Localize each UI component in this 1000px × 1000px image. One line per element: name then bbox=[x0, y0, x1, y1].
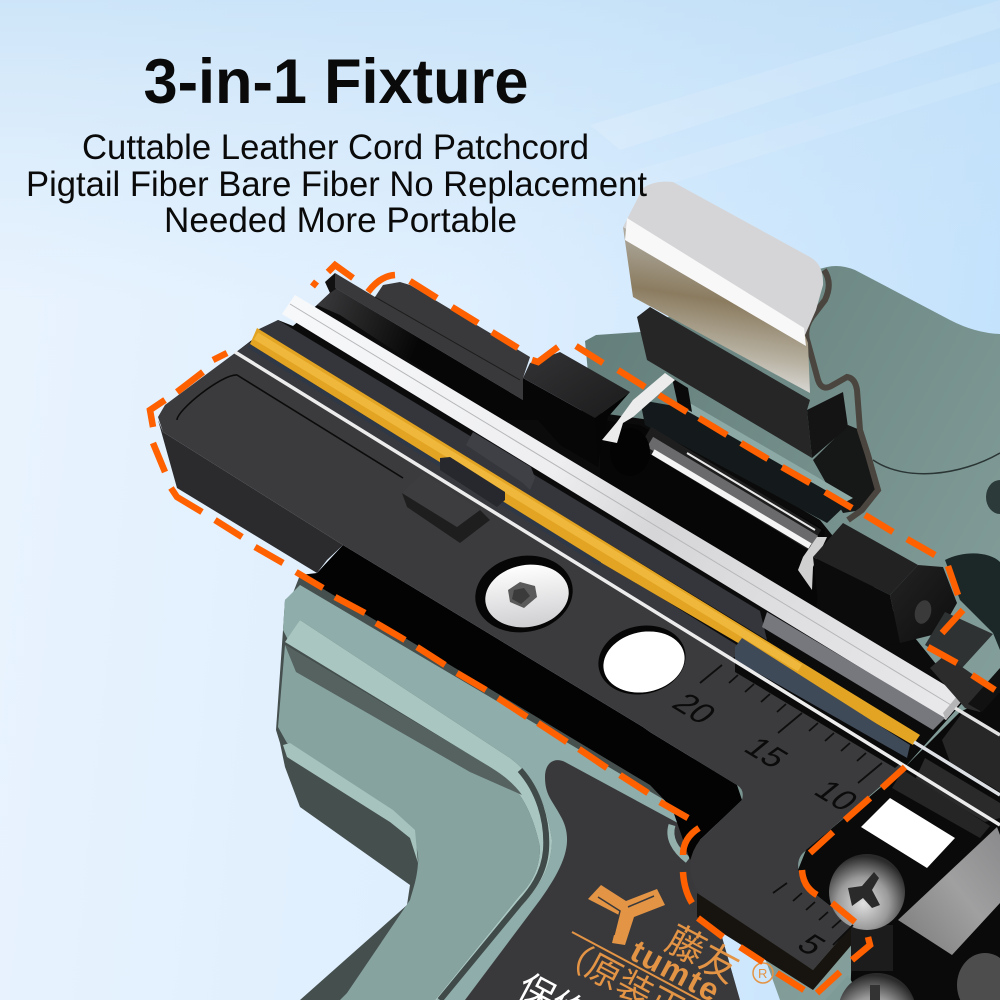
yellow patch cord bbox=[249, 328, 920, 745]
white through hole bbox=[592, 618, 692, 702]
curved groove shading bbox=[440, 770, 546, 1000]
teal sliver bbox=[825, 975, 862, 1000]
ruler numbers bbox=[665, 687, 867, 961]
tab step on plate bbox=[402, 473, 490, 543]
socket head screw bbox=[469, 548, 579, 640]
lever edge strip bbox=[806, 270, 878, 520]
floor shadow band bbox=[285, 645, 522, 795]
rod cap bbox=[610, 428, 650, 476]
recessed rounded rectangle outline bbox=[177, 375, 403, 478]
black posts under pad bbox=[672, 378, 692, 412]
plate outer chamfer bbox=[276, 575, 700, 1000]
band below yellow cord bbox=[235, 342, 745, 660]
wedge shadow bbox=[317, 288, 540, 420]
lever front fold bbox=[623, 227, 810, 393]
ruler scale bbox=[700, 665, 882, 945]
chinese brand name: 藤友 bbox=[659, 919, 746, 992]
black tray under rod bbox=[600, 420, 825, 620]
grey block under white rail bbox=[762, 612, 945, 730]
green base plate: lower left bbox=[276, 575, 740, 1000]
top rail with black wedge bbox=[317, 273, 540, 420]
plate upper flat face bbox=[283, 585, 700, 1000]
logo mark bbox=[588, 885, 665, 945]
ruler numbers: 10 bbox=[807, 774, 867, 817]
black housing bbox=[798, 692, 1000, 1000]
navy block under yellow cord bbox=[735, 638, 910, 768]
metal clip lever bbox=[623, 182, 878, 520]
brand logo bbox=[511, 885, 773, 1000]
clip bridges over cords bbox=[440, 432, 535, 507]
black fixture body bbox=[158, 288, 965, 990]
black logo panel bbox=[465, 760, 740, 1000]
small end post bbox=[325, 273, 340, 293]
panel between wires 1 and 2 bbox=[942, 712, 1000, 792]
left spring clip bbox=[602, 373, 675, 443]
teal strip above hinge bbox=[680, 402, 853, 505]
left hex block bbox=[523, 352, 630, 467]
shadow band under plate bbox=[300, 545, 742, 860]
grey guide band bbox=[257, 320, 767, 640]
description text: Needed More Portable bbox=[164, 201, 517, 240]
dark wedge behind hex bbox=[925, 612, 993, 668]
description text bbox=[26, 128, 647, 240]
screw stem bbox=[851, 925, 893, 971]
small end stop bbox=[930, 655, 995, 712]
plate top face with foot bbox=[158, 353, 903, 970]
phillips screw bbox=[829, 854, 905, 930]
right spring clip bbox=[798, 537, 827, 590]
green base plate: upper right bbox=[585, 266, 1000, 1000]
hinge assembly bbox=[523, 182, 957, 650]
lower rim highlight bbox=[283, 743, 418, 863]
plate side face bbox=[158, 420, 343, 573]
registered mark: R bbox=[758, 966, 767, 981]
lever highlight bbox=[625, 218, 806, 346]
panel under wire 3 bbox=[892, 770, 990, 838]
orange dashed outline bbox=[150, 265, 995, 993]
brand underline bbox=[572, 932, 705, 1000]
lower screw bbox=[838, 973, 916, 1000]
registered mark bbox=[753, 963, 773, 983]
right side hardware bbox=[798, 612, 1000, 1000]
panel between wires 2 and 3 bbox=[915, 758, 1000, 822]
description text: Pigtail Fiber Bare Fiber No Replacement bbox=[26, 165, 647, 204]
ruler numbers: 5 bbox=[790, 928, 834, 961]
ruler numbers: 15 bbox=[737, 731, 797, 774]
right hex block bbox=[813, 523, 957, 650]
tray behind rails bbox=[235, 288, 965, 767]
title: 3-in-1 Fixture bbox=[144, 47, 528, 117]
plate bright chamfer bbox=[285, 620, 552, 1000]
grey metal block bbox=[898, 827, 1000, 955]
lower right blob bbox=[957, 953, 1000, 1000]
white leather cord rail bbox=[282, 295, 965, 720]
rail face bbox=[335, 273, 530, 403]
lever top bbox=[623, 182, 823, 335]
black pad bbox=[637, 307, 848, 458]
description text: Cuttable Leather Cord Patchcord bbox=[82, 128, 589, 167]
plate recessed floor bbox=[278, 645, 540, 1000]
glass dark face bbox=[640, 400, 848, 523]
dark fan under pad bbox=[813, 425, 878, 513]
teal rim at foot corner bbox=[671, 825, 688, 860]
fiber wires bbox=[235, 352, 1000, 825]
foot front side bbox=[697, 893, 860, 990]
white label bbox=[861, 798, 955, 868]
steel rod bbox=[645, 437, 815, 546]
ruler numbers: 20 bbox=[665, 687, 725, 730]
